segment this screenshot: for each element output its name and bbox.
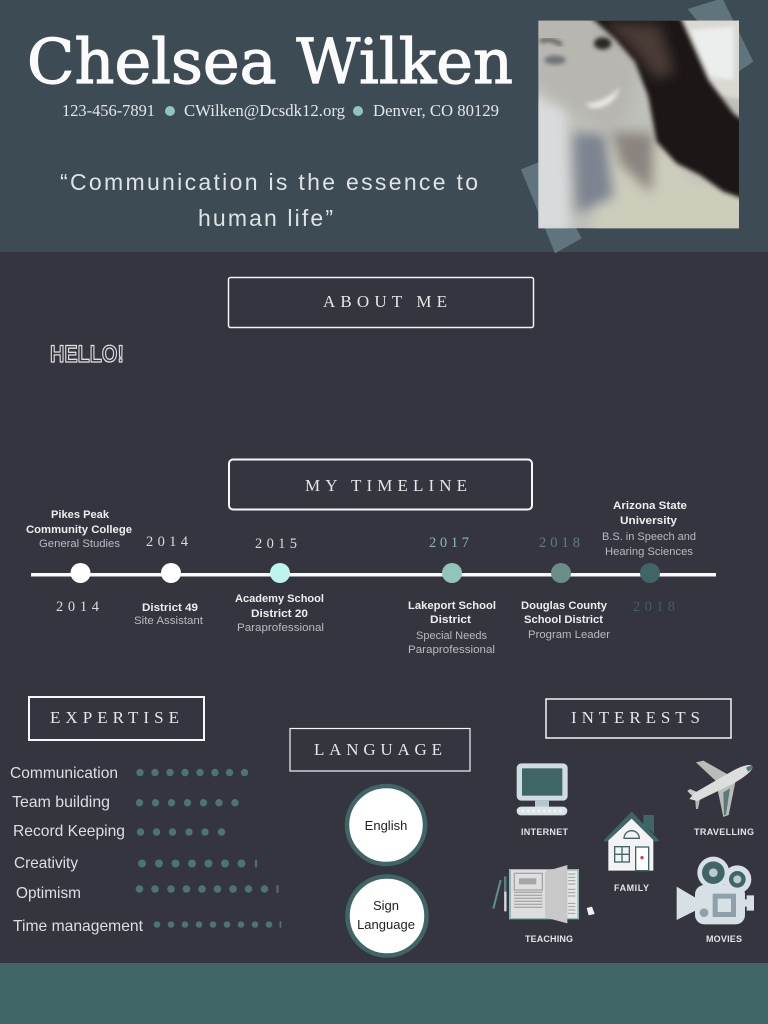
milestone: Douglas County School District: School District (524, 614, 603, 626)
skill: optimism (16, 885, 278, 902)
heading: expertise (29, 697, 204, 740)
icon: computer (517, 763, 568, 815)
milestone: Arizona State University: Hearing Sciences (605, 546, 694, 558)
contact line (62, 101, 499, 120)
milestone: Lakeport School District: Special Needs (416, 630, 487, 642)
label: teaching: TEACHING (525, 934, 573, 944)
timeline axis (31, 573, 716, 576)
tape top right (688, 0, 753, 72)
panel: expertise (10, 697, 281, 935)
milestone: Douglas County School District: 2018 (539, 535, 580, 551)
quote: human life” (198, 205, 333, 231)
portrait (538, 20, 739, 228)
timeline (26, 500, 716, 656)
milestone: Academy School District 20: District 20 (251, 608, 308, 620)
heading: expertise: EXPERTISE (50, 708, 179, 727)
icon: movie camera (677, 857, 754, 924)
milestone: Arizona State University: 2018 (633, 599, 675, 615)
milestone: Lakeport School District: District (430, 614, 471, 626)
heading: my timeline (229, 460, 532, 510)
skill: optimism: Optimism (16, 885, 81, 902)
footer band (0, 963, 768, 1024)
icon: house (603, 812, 659, 871)
skill: team building: Team building (12, 794, 110, 811)
milestone: Douglas County School District: Douglas County (521, 600, 608, 612)
milestone: District 49: Site Assistant (134, 615, 203, 627)
heading: about me (228, 278, 534, 328)
milestone markers (70, 563, 660, 583)
milestone: Pikes Peak: 2014 (56, 599, 100, 615)
label: movies: MOVIES (706, 934, 742, 944)
icon: book and pens (493, 865, 595, 923)
milestone: District 49 (134, 534, 203, 627)
label: travelling: TRAVELLING (694, 827, 754, 837)
skill: record keeping: Record Keeping (13, 823, 125, 840)
language badge: Sign Language: Sign (373, 898, 399, 913)
heading: about me: ABOUT ME (323, 292, 447, 311)
milestone: Douglas County School District (521, 535, 610, 641)
contact line: CWilken@Dcsdk12.org (184, 101, 345, 120)
milestone: Arizona State University: Arizona State (613, 500, 687, 512)
header band (0, 0, 768, 252)
label: internet: INTERNET (521, 827, 568, 837)
contact line: 123-456-7891 (62, 101, 155, 120)
heading: language: LANGUAGE (314, 740, 442, 759)
panel: interests (493, 699, 754, 944)
quote (60, 169, 478, 231)
skill: team building (12, 794, 239, 811)
milestone: Academy School District 20: Academy School (235, 593, 324, 605)
milestone: Arizona State University: B.S. in Speech and (602, 531, 696, 543)
skill: creativity: Creativity (14, 855, 78, 872)
label: family: FAMILY (614, 883, 649, 893)
milestone: Pikes Peak: Pikes Peak (51, 509, 110, 521)
skill: time management: Time management (13, 918, 144, 935)
milestone: Academy School District 20: Paraprofessional (237, 622, 324, 634)
milestone: District 49: District 49 (142, 602, 198, 614)
heading: language (290, 728, 470, 771)
milestone: Douglas County School District: Program Leader (528, 629, 610, 641)
skill: time management (13, 918, 281, 935)
milestone: District 49: 2014 (146, 534, 189, 550)
skill: creativity (14, 855, 257, 872)
milestone: Lakeport School District: Paraprofessional (408, 644, 495, 656)
language badge: English: English (365, 818, 407, 833)
contact line: Denver, CO 80129 (373, 101, 499, 120)
tape bottom left (521, 162, 582, 253)
skill: record keeping (13, 823, 225, 840)
milestone: Pikes Peak: Community College (26, 524, 132, 536)
milestone: Pikes Peak: General Studies (39, 538, 121, 550)
quote: “Communication is the essence to (60, 169, 478, 195)
milestone: Lakeport School District: Lakeport School (408, 600, 496, 612)
milestone: Academy School District 20: 2015 (255, 536, 297, 552)
milestone: Arizona State University: University (620, 515, 678, 527)
skill: communication (10, 765, 248, 782)
milestone: Lakeport School District (408, 535, 496, 656)
heading: my timeline: MY TIMELINE (305, 476, 467, 495)
milestone: Pikes Peak (26, 509, 132, 615)
name title: Chelsea Wilken (27, 25, 513, 98)
language badge: Sign Language: Language (357, 917, 415, 932)
language badge: English (347, 786, 425, 864)
heading: interests (546, 699, 731, 738)
milestone: Lakeport School District: 2017 (429, 535, 469, 551)
milestone: Academy School District 20 (235, 536, 324, 634)
milestone: Arizona State University (602, 500, 696, 615)
panel: language (290, 728, 470, 956)
hello lettering: HELLO! (50, 341, 124, 368)
heading: interests: INTERESTS (571, 708, 700, 727)
skill: communication: Communication (10, 765, 118, 782)
language badge: Sign Language (348, 876, 426, 956)
icon: airplane (687, 761, 753, 817)
photo with tape (521, 0, 753, 253)
